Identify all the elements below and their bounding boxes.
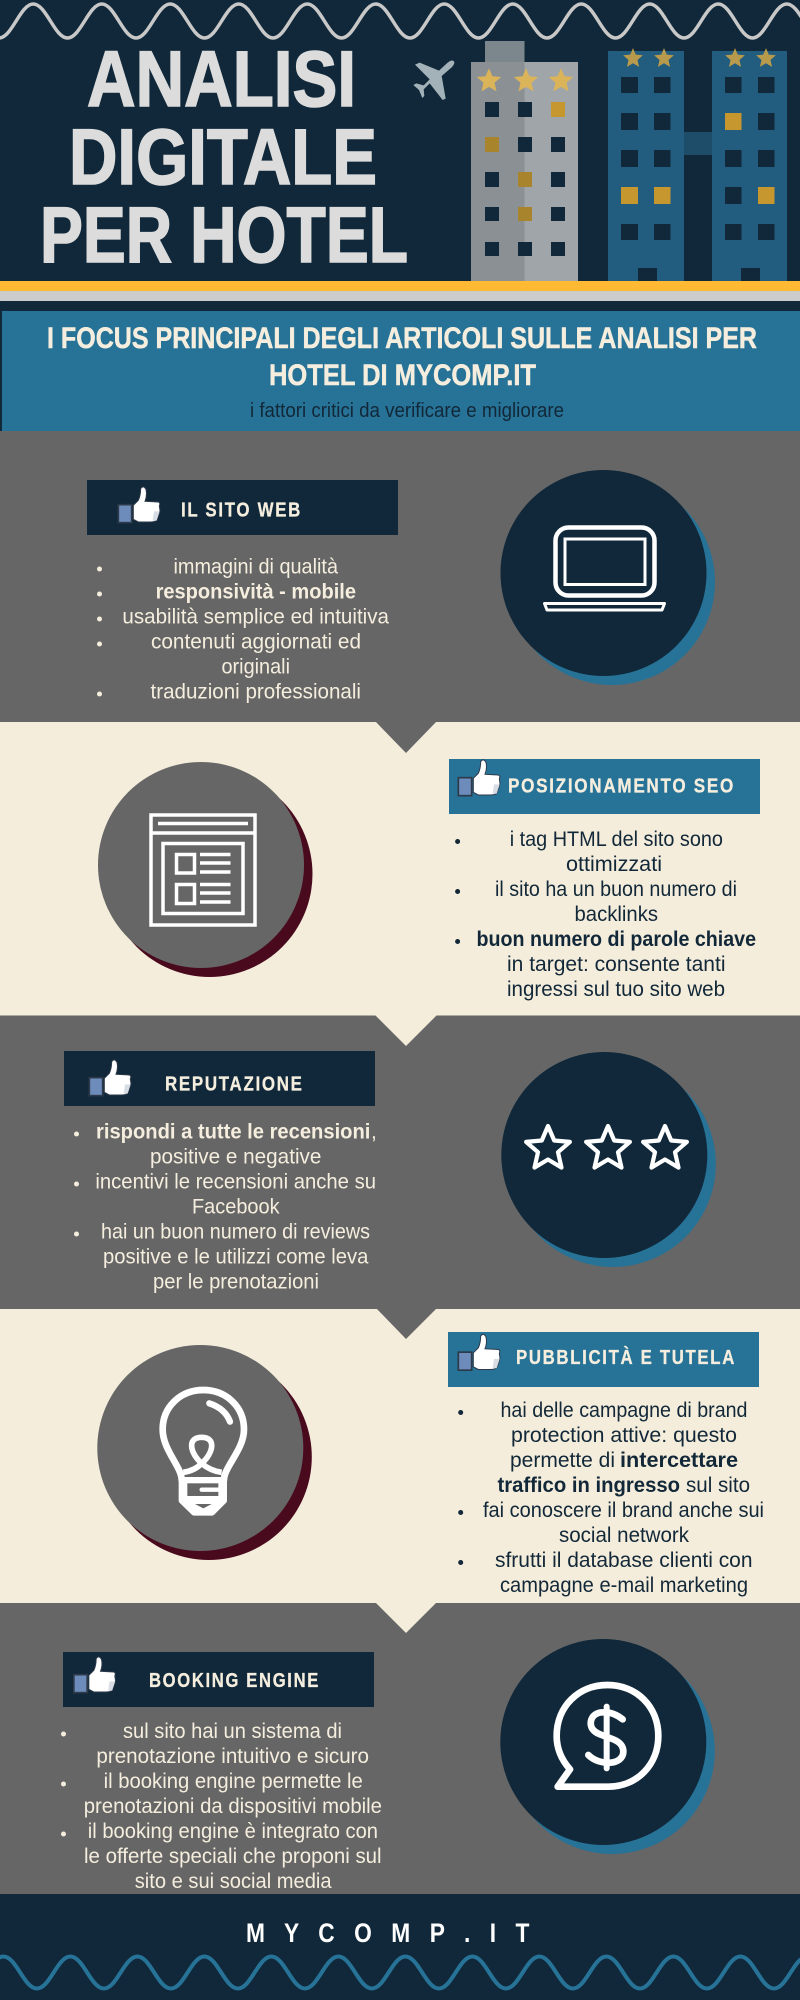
bullet list: reputazione: rispondi a tutte le recensioni — [96, 1121, 370, 1144]
bullet list: booking engine: sul sito hai un sistema di — [123, 1720, 342, 1743]
bullet list: reputazione: Facebook — [192, 1196, 280, 1219]
yellow and grey stripes — [0, 281, 800, 301]
bullet list: reputazione: positive e le utilizzi come leva — [103, 1246, 369, 1269]
intro banner: HOTEL DI MYCOMP.IT — [269, 359, 536, 392]
icon circle: laptop — [500, 470, 715, 685]
header panel — [0, 4, 800, 301]
arrow pointer — [375, 1015, 437, 1046]
icon circle: web page — [98, 762, 312, 977]
bullet list: booking engine: prenotazione intuitivo e sicuro — [96, 1745, 369, 1768]
icon circle: dollar speech bubble — [500, 1639, 715, 1854]
bullet list: booking engine: il booking engine permette le — [104, 1770, 363, 1793]
bullet list: il sito web: immagini di qualità — [174, 556, 338, 578]
bullet list: pubblicita e tutela: campagne e-mail marketing — [500, 1574, 748, 1597]
icon: thumbs up — [458, 1334, 500, 1370]
bullet list: il sito web: originali — [222, 656, 290, 678]
heading: pubblicita e tutela — [448, 1332, 759, 1387]
panel: il sito web — [0, 431, 800, 722]
icon circle: three stars — [501, 1052, 716, 1267]
decorative top wave — [0, 4, 800, 38]
arrow pointer — [375, 721, 437, 753]
intro banner: i fattori critici da verificare e migliorare — [250, 400, 564, 422]
bullet list: pubblicita e tutela: hai delle campagne di brand — [500, 1399, 748, 1422]
footer — [0, 1894, 800, 2000]
bullet list: posizionamento seo: ottimizzati — [566, 853, 662, 876]
bullet list: booking engine — [61, 1720, 382, 1893]
heading: booking engine: BOOKING ENGINE — [149, 1670, 320, 1692]
bullet list: il sito web: responsività - mobile — [156, 580, 356, 604]
icon: thumbs up — [118, 487, 160, 523]
icon: airplane — [413, 60, 454, 100]
bullet list: il sito web — [97, 556, 389, 704]
bullet list: booking engine: prenotazioni da dispositivi mobile — [84, 1795, 382, 1818]
title — [40, 34, 408, 279]
heading: booking engine — [63, 1652, 374, 1707]
grey hotel building — [471, 41, 578, 281]
arrow pointer — [376, 1308, 437, 1339]
bullet list: posizionamento seo: buon numero di parole chiave — [476, 928, 756, 951]
bullet list: pubblicita e tutela — [458, 1399, 764, 1597]
icon circle: light bulb — [97, 1345, 312, 1560]
heading: il sito web — [87, 480, 398, 535]
bullet list: pubblicita e tutela: sfrutti il database clienti con — [495, 1549, 752, 1572]
bullet list: reputazione: per le prenotazioni — [153, 1271, 319, 1294]
bullet list: reputazione — [74, 1121, 377, 1294]
bullet list: booking engine: sito e sui social media — [135, 1870, 332, 1893]
bullet list: pubblicita e tutela: protection attive: questo — [511, 1424, 737, 1447]
bullet list: pubblicita e tutela: intercettare — [620, 1449, 738, 1472]
icon: thumbs up — [89, 1060, 131, 1096]
bullet list: pubblicita e tutela: traffico in ingresso — [498, 1474, 680, 1497]
bullet list: reputazione: , — [371, 1121, 377, 1144]
decorative bottom wave — [0, 1956, 800, 1988]
bullet list: reputazione: incentivi le recensioni anche su — [95, 1171, 376, 1194]
bullet list: booking engine: il booking engine è integrato con — [88, 1820, 378, 1843]
bullet list: il sito web: traduzioni professionali — [150, 680, 361, 704]
intro banner — [2, 311, 800, 431]
heading: posizionamento seo — [449, 759, 760, 814]
bullet list: posizionamento seo: i tag HTML del sito sono — [510, 828, 723, 851]
bullet list: booking engine: le offerte speciali che proponi sul — [84, 1845, 382, 1868]
bullet list: il sito web: contenuti aggiornati ed — [151, 630, 361, 654]
bullet list: pubblicita e tutela: sul sito — [686, 1474, 750, 1497]
title: ANALISI — [87, 34, 356, 123]
footer brand text: M Y C O M P . I T — [246, 1918, 536, 1948]
bullet list: posizionamento seo: il sito ha un buon numero di — [495, 878, 737, 901]
heading: posizionamento seo: POSIZIONAMENTO SEO — [508, 776, 735, 798]
arrow pointer — [375, 1602, 437, 1633]
panel: posizionamento seo — [0, 721, 800, 1016]
bullet list: pubblicita e tutela: permette di — [510, 1449, 615, 1472]
bullet list: posizionamento seo: ingressi sul tuo sito web — [507, 978, 725, 1001]
icon: thumbs up — [458, 760, 500, 796]
bullet list: pubblicita e tutela: fai conoscere il brand anche sui — [483, 1499, 764, 1522]
blue twin hotel towers — [608, 48, 787, 281]
heading: reputazione: REPUTAZIONE — [165, 1074, 304, 1096]
bullet list: il sito web: usabilità semplice ed intuitiva — [122, 606, 389, 628]
bullet list: posizionamento seo — [455, 828, 756, 1001]
title: DIGITALE — [69, 112, 377, 201]
bullet list: reputazione: hai un buon numero di reviews — [101, 1221, 370, 1244]
bullet list: pubblicita e tutela: social network — [559, 1524, 689, 1547]
heading: pubblicita e tutela: PUBBLICITÀ E TUTELA — [516, 1346, 736, 1369]
bullet list: posizionamento seo: backlinks — [574, 903, 658, 926]
heading: il sito web: IL SITO WEB — [181, 500, 302, 522]
heading: reputazione — [64, 1051, 375, 1106]
bullet list: reputazione: positive e negative — [150, 1146, 321, 1169]
icon: thumbs up — [74, 1657, 115, 1693]
bullet list: posizionamento seo: in target: consente tanti — [507, 953, 726, 976]
panel: pubblicita e tutela — [0, 1308, 800, 1603]
panel: booking engine — [0, 1602, 800, 1894]
title: PER HOTEL — [40, 190, 408, 279]
panel: reputazione — [0, 1015, 800, 1309]
